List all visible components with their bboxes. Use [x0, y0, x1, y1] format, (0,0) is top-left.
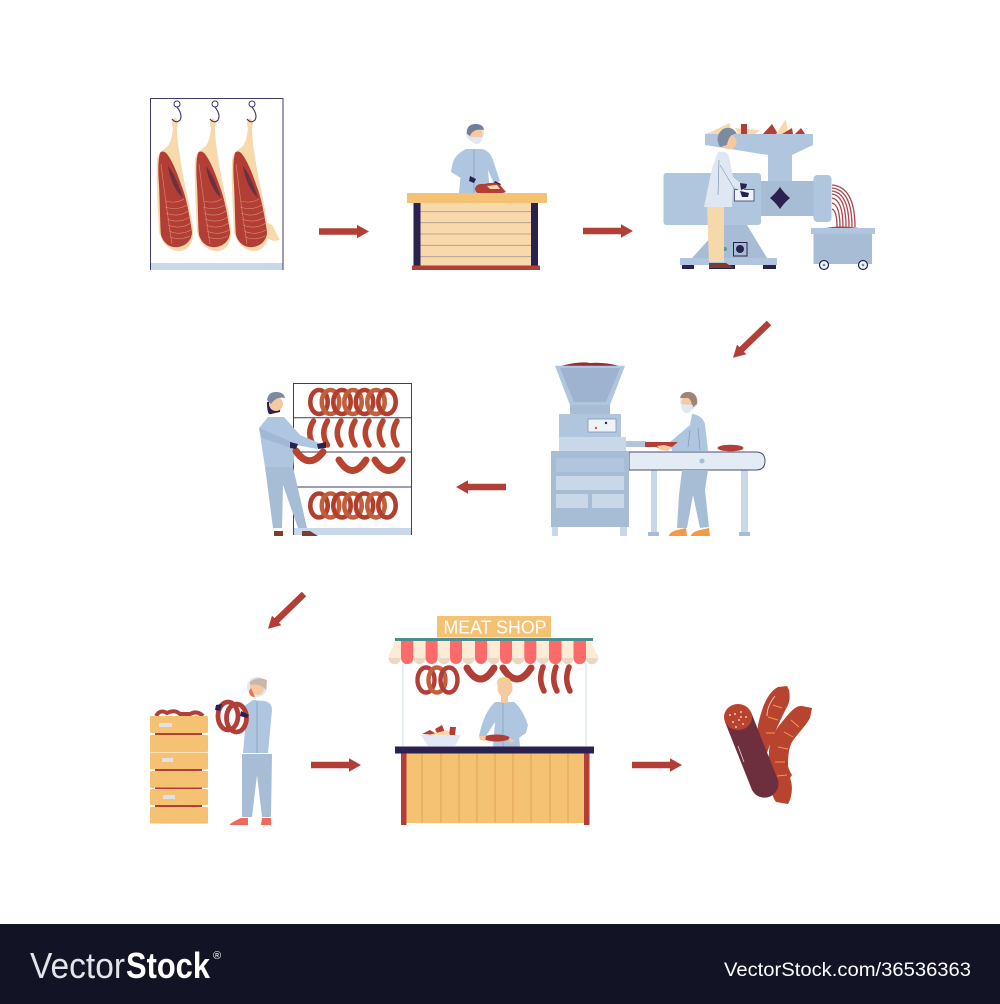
arrow 3	[728, 318, 774, 363]
arrow 2	[583, 224, 633, 238]
step 5: sausage drying rack with worker	[259, 384, 412, 536]
stall posts	[403, 664, 586, 746]
arrow 5	[263, 589, 309, 634]
cabinet and feet	[682, 265, 694, 269]
sausage maker worker	[645, 392, 710, 536]
arrow 7	[632, 758, 682, 772]
step 6: crates and packing worker	[150, 677, 272, 825]
ring sausages bottom row	[310, 494, 396, 518]
rack frame	[293, 384, 412, 535]
step 1: hanging carcasses	[150, 98, 283, 270]
arrow 6	[311, 758, 361, 772]
smoked sausage front	[769, 706, 812, 804]
rack worker	[259, 392, 326, 536]
woman operator	[704, 128, 749, 268]
step 4: sausage filling machine and conveyor	[551, 362, 765, 536]
sign: MEAT SHOP	[444, 618, 546, 638]
arrow 1	[319, 225, 369, 238]
footer band	[0, 924, 1000, 1004]
brand logo	[30, 945, 221, 986]
brand logo: Vector	[30, 945, 125, 986]
image id: VectorStock.com/36536363	[724, 960, 971, 981]
cart	[811, 226, 875, 270]
awning	[388, 638, 598, 664]
arrow 4	[456, 480, 506, 494]
curved sausages row	[310, 421, 397, 445]
counter	[395, 746, 594, 825]
step 3: meat grinder	[664, 119, 875, 270]
control screen	[734, 190, 754, 201]
shopkeeper	[479, 677, 528, 747]
step 8: finished sausages	[724, 686, 812, 804]
conveyor	[629, 445, 765, 536]
meat pieces	[706, 119, 805, 134]
brand logo: ®	[213, 950, 221, 962]
salami	[724, 704, 778, 798]
crates	[150, 711, 208, 824]
step 2: butcher at table	[407, 124, 547, 270]
brand logo: Stock	[126, 945, 211, 986]
arched sausages row	[339, 460, 402, 470]
table	[407, 193, 547, 270]
butcher	[451, 124, 506, 194]
packing worker	[215, 677, 272, 825]
ring sausages top row	[310, 390, 396, 414]
minced meat strands	[832, 185, 855, 227]
bowl of meat	[421, 725, 461, 746]
filling machine	[551, 362, 646, 536]
smoked sausage back	[758, 686, 790, 753]
step 7: meat shop stall	[388, 616, 598, 825]
hanging sausages	[418, 667, 570, 692]
